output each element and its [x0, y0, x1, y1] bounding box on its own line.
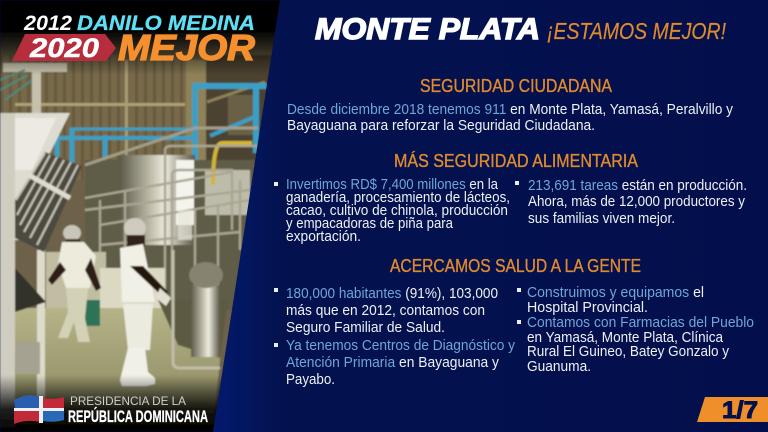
bullet: centros: Payabo.: [286, 372, 335, 388]
tall steel tank: [191, 285, 220, 357]
bullet: farmacias: en Yamasá, Monte Plata, Clínica: [527, 330, 724, 346]
icon: dominican flag: [14, 395, 64, 424]
section: salud: [274, 255, 754, 388]
bullet: habitantes: más que en 2012, contamos con: [286, 303, 485, 319]
back wall lower: [46, 252, 106, 312]
bullet: habitantes: [274, 286, 498, 336]
bullet: tareas: [515, 178, 747, 227]
photo: dairy processing plant: [0, 0, 290, 432]
logo year 2020: 2020: [29, 33, 99, 63]
worker left: [48, 225, 101, 342]
presidencia text: PRESIDENCIA DE LA: [70, 394, 186, 408]
red arrow banner: [12, 34, 116, 61]
bullet: inversión: y empacadoras de piña para: [286, 216, 454, 232]
yellow pipe: [213, 143, 252, 185]
white hopper and column: [0, 113, 70, 240]
campaign logo: [12, 12, 255, 68]
paragraph: [287, 102, 734, 134]
bullet: inversión: Invertimos RD$ 7,400 millones en la: [286, 177, 499, 193]
bullet: centros: Atención Primaria en Bayaguana y: [286, 355, 500, 371]
bullet: inversión: cacao, cultivo de chinola, producción: [286, 203, 508, 219]
heading: ACERCAMOS SALUD A LA GENTE: [390, 255, 641, 276]
bullet: tareas: Ahora, más de 12,000 productores y: [528, 194, 746, 210]
logo years 2012: 2012: [23, 12, 72, 35]
presidency logo: [14, 394, 208, 426]
republica text: REPÚBLICA DOMINICANA: [68, 407, 208, 426]
logo word mejor: MEJOR: [118, 27, 255, 68]
bullet: farmacias: [517, 315, 754, 375]
floor: [15, 308, 225, 432]
worker right: [120, 218, 171, 386]
heading: MÁS SEGURIDAD ALIMENTARIA: [394, 150, 639, 171]
bullet: farmacias: Contamos con Farmacias del Pueblo: [527, 315, 754, 331]
subtitle: ¡ESTAMOS MEJOR!: [547, 18, 727, 44]
bullet: hospital: Hospital Provincial.: [527, 300, 648, 316]
section: seguridad ciudadana: [287, 75, 734, 134]
title: [315, 13, 727, 46]
section: seguridad alimentaria: [274, 150, 747, 245]
paragraph: Desde diciembre 2018 tenemos 911 en Monte Plata, Yamasá, Peralvillo y: [287, 102, 734, 118]
bullet: habitantes: Seguro Familiar de Salud.: [286, 320, 445, 336]
bullet: hospital: [517, 285, 704, 316]
blue pipes: [56, 86, 264, 235]
bullet: hospital: Construimos y equipamos el: [527, 285, 704, 301]
bullet: centros: [274, 338, 516, 388]
paragraph: Bayaguana para reforzar la Seguridad Ciudadana.: [287, 118, 595, 134]
bullet: inversión: [274, 177, 510, 245]
bullet: inversión: exportación.: [286, 229, 361, 245]
roof beam: [3, 63, 67, 115]
bullet: farmacias: Rural El Guineo, Batey Gonzalo y: [527, 344, 730, 360]
heading: SEGURIDAD CIUDADANA: [420, 75, 613, 96]
bullet: centros: Ya tenemos Centros de Diagnóstico y: [286, 338, 516, 354]
tube rack: [15, 152, 82, 252]
tank room dark backdrop: [85, 160, 255, 310]
navy content panel: [213, 0, 768, 432]
bullet: tareas: 213,691 tareas están en producción.: [528, 178, 747, 194]
logo name: DANILO MEDINA: [77, 12, 255, 35]
bullet: tareas: sus familias viven mejor.: [528, 211, 675, 227]
page badge: [697, 397, 768, 424]
bullet: farmacias: Guanuma.: [527, 359, 591, 375]
page badge: 1/7: [722, 397, 758, 424]
bullet: inversión: ganadería, procesamiento de lácteos,: [286, 190, 510, 206]
railings: [85, 146, 258, 345]
bullet: habitantes: 180,000 habitantes (91%), 103,000: [286, 286, 498, 302]
title: MONTE PLATA: [315, 13, 540, 46]
